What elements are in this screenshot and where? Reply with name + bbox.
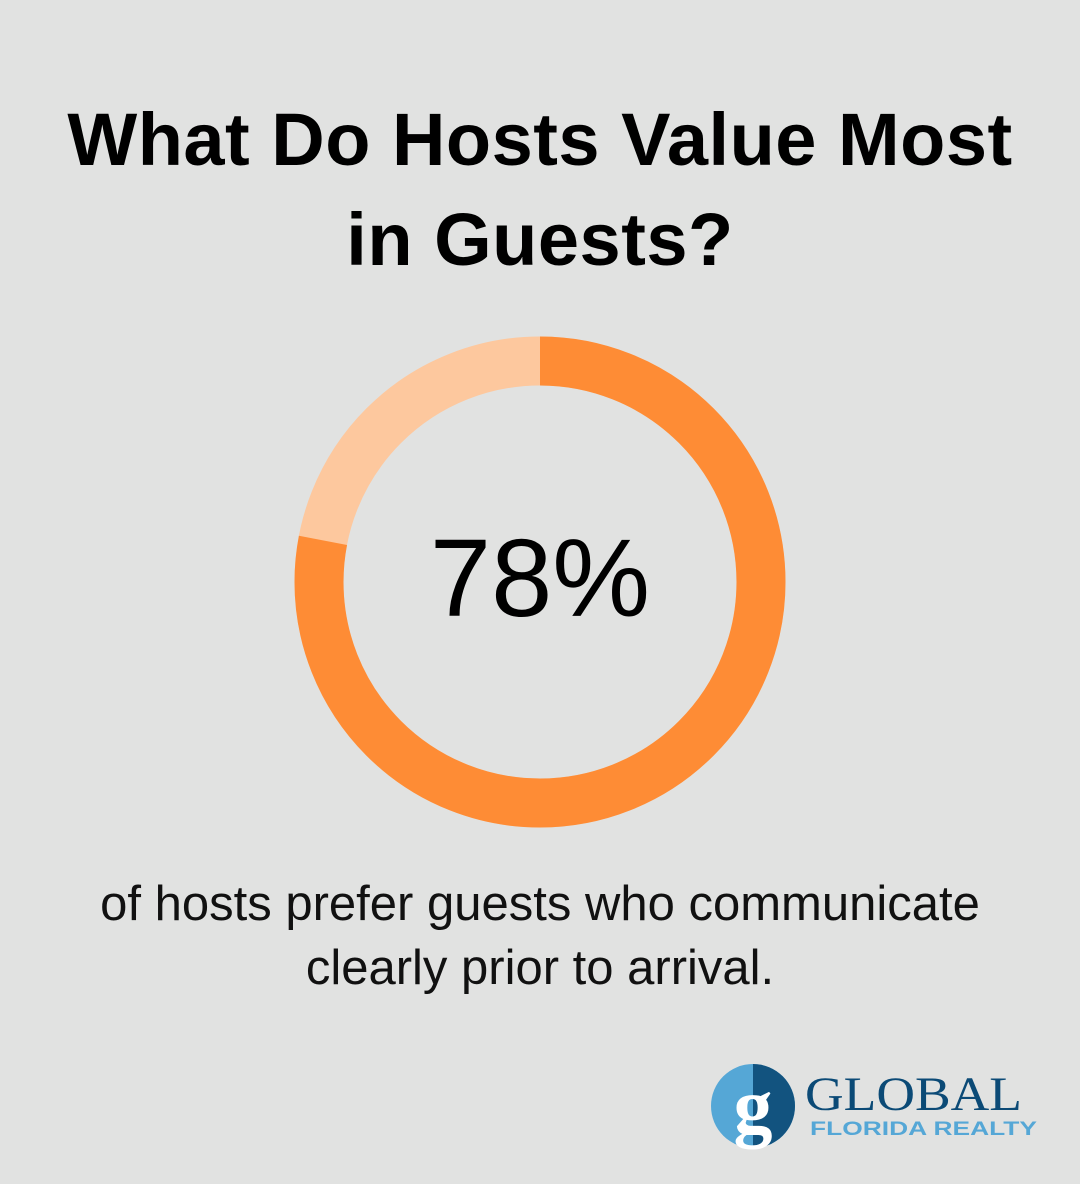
logo: g <box>734 1062 772 1149</box>
title <box>67 98 1013 281</box>
title: What Do Hosts Value Most <box>67 98 1013 181</box>
description text: clearly prior to arrival. <box>306 941 774 995</box>
logo: FLORIDA REALTY <box>810 1119 1037 1140</box>
description text: of hosts prefer guests who communicate <box>100 877 980 931</box>
donut chart: 78% <box>430 517 650 640</box>
logo: GLOBAL <box>805 1068 1022 1121</box>
description text <box>100 877 980 995</box>
logo <box>711 1062 1037 1150</box>
title: in Guests? <box>346 198 734 281</box>
